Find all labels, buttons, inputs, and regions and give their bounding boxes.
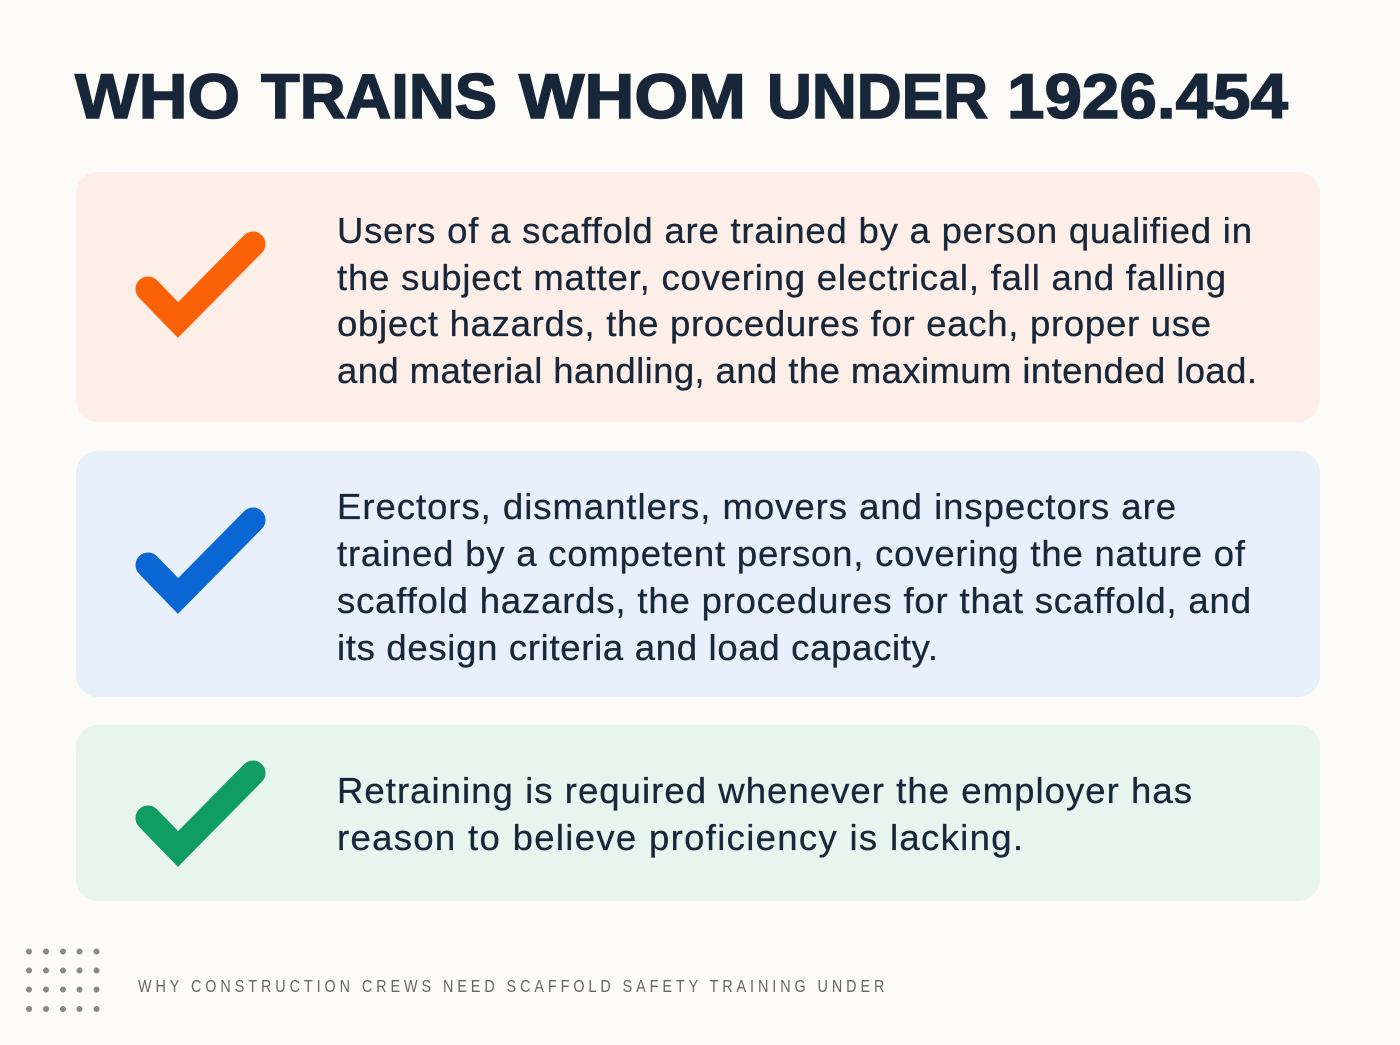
panel: erectors and inspectors: [76, 451, 1320, 697]
text: retraining requirement: reason to believe proficiency is lacking.: [337, 817, 1023, 858]
text: users training: and material handling, and the maximum intended load.: [337, 350, 1257, 391]
title: TRAINS: [261, 62, 497, 132]
text: erectors training: Erectors, dismantlers, movers and inspectors are: [337, 486, 1176, 527]
icon: green check mark: [148, 773, 253, 849]
title: UNDER: [767, 62, 988, 132]
text: users training: Users of a scaffold are trained by a person qualified in: [337, 210, 1252, 251]
panel: retraining: [76, 725, 1320, 901]
panel: users of a scaffold: [76, 172, 1320, 422]
footer caption: WHY CONSTRUCTION CREWS NEED SCAFFOLD SAFETY TRAINING UNDER: [138, 977, 884, 996]
text: retraining requirement: [337, 770, 1192, 858]
text: erectors training: scaffold hazards, the procedures for that scaffold, and: [337, 580, 1251, 621]
title: 1926.454: [1007, 62, 1288, 132]
text: retraining requirement: Retraining is required whenever the employer has: [337, 770, 1192, 811]
title: WHO: [75, 62, 240, 132]
dot grid decoration: [26, 948, 100, 1012]
title: WHOM: [519, 62, 746, 132]
text: users training: the subject matter, covering electrical, fall and falling: [337, 257, 1226, 298]
icon: blue check mark: [148, 520, 253, 596]
text: erectors training: its design criteria and load capacity.: [337, 627, 938, 668]
icon: orange check mark: [148, 244, 253, 320]
text: users training: [337, 210, 1257, 391]
text: erectors training: [337, 486, 1251, 668]
title: [75, 62, 1288, 132]
text: erectors training: trained by a competent person, covering the nature of: [337, 533, 1246, 574]
text: users training: object hazards, the procedures for each, proper use: [337, 303, 1211, 344]
